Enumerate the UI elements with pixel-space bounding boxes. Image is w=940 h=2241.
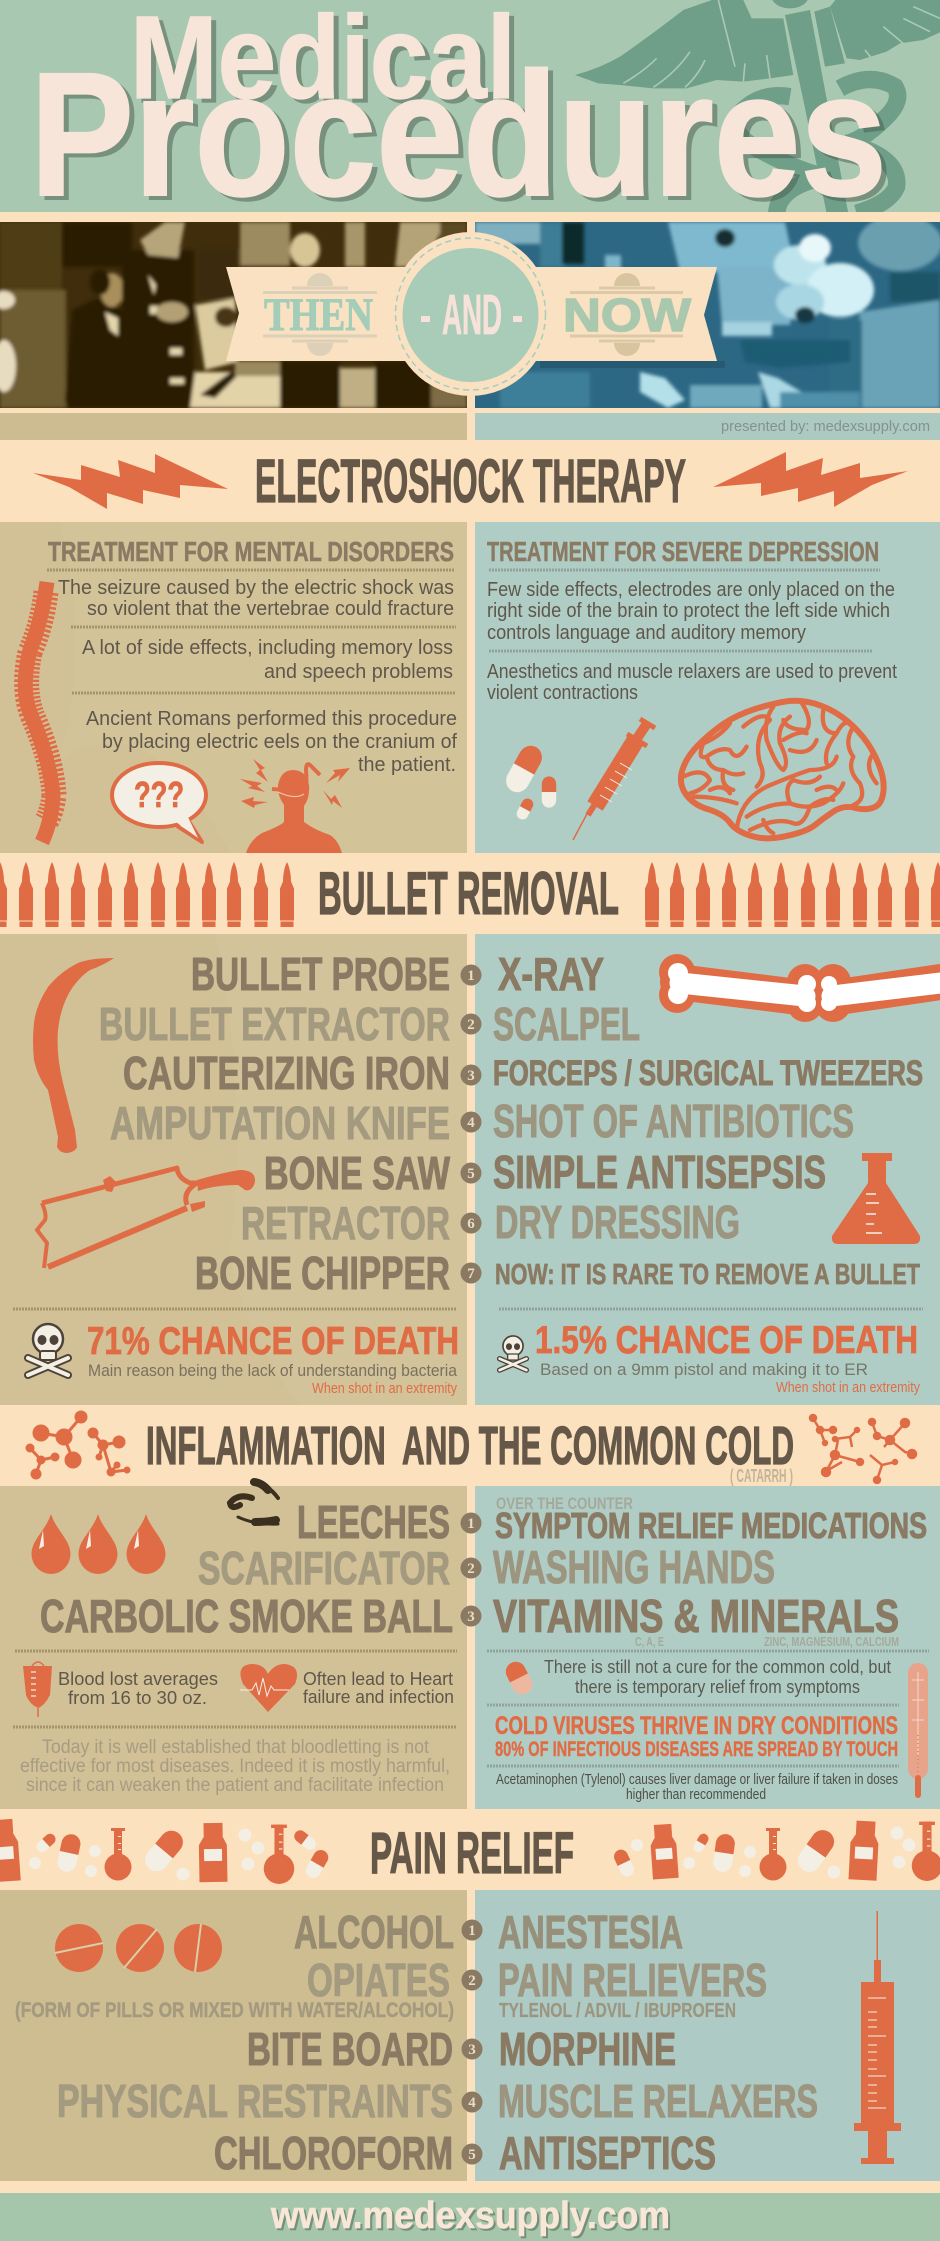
numbered markers: pain relief: [462, 1920, 482, 2164]
list: bullet tools: [99, 948, 450, 1299]
numbered markers: pain relief: 5: [468, 2147, 476, 2163]
then label: [263, 273, 377, 356]
stat: 1.5 percent: Based on a 9mm pistol and making it to ER: [540, 1360, 868, 1379]
panel: bullet removal then: [0, 934, 467, 1405]
numbered markers: pain relief: 2: [468, 1973, 476, 1989]
panel: inflammation now: [475, 1486, 940, 1809]
text block: so violent that the vertebrae could fracture: [87, 598, 454, 620]
list: modern pain relief: ANESTESIA: [498, 1906, 683, 1958]
icon: skull: [28, 1324, 68, 1375]
list: old pain relief: (FORM OF PILLS OR MIXED WITH WATER/ALCOHOL): [15, 1999, 454, 2022]
list: cold remedies: WASHING HANDS: [493, 1541, 775, 1593]
text block: bloodletting: since it can weaken the patient and facilitate infection: [26, 1775, 444, 1796]
panel: electroshock then: [0, 522, 467, 853]
icon: spine: [25, 582, 54, 842]
sublabel: catarrh: ( CATARRH ): [730, 1466, 793, 1486]
icon: molecule left: [27, 1412, 129, 1478]
icon: bullets left: [0, 862, 294, 927]
website url: www.medexsupply.com: [270, 2195, 670, 2237]
numbered markers: pain relief: 3: [468, 2042, 476, 2058]
icon: amputation knife: [33, 958, 114, 1153]
text block: [487, 579, 895, 644]
icon: leeches: [230, 1482, 278, 1524]
icon: thermometer: [908, 1663, 928, 1798]
text block: Few side effects, electrodes are only placed on the: [487, 579, 895, 601]
stat: 71 percent: 71% CHANCE OF DEATH: [87, 1320, 459, 1363]
heading: bullet removal: BULLET REMOVAL: [318, 860, 619, 927]
list: modern steps: [493, 948, 923, 1291]
text block: right side of the brain to protect the left side which: [487, 600, 890, 622]
list: old pain relief: CHLOROFORM: [214, 2127, 453, 2179]
list: cold remedies: C, A, E: [635, 1634, 664, 1649]
numbered markers: inflammation: [460, 1512, 482, 1626]
text block: violent contractions: [487, 682, 638, 704]
text: heart failure: failure and infection: [303, 1686, 454, 1707]
text block: Anesthetics and muscle relaxers are used to prevent: [487, 661, 897, 683]
list: bullet tools: CAUTERIZING IRON: [123, 1047, 450, 1099]
icon: brain: [681, 700, 884, 838]
text block: [58, 577, 454, 620]
text: heart failure: Often lead to Heart: [303, 1668, 453, 1689]
text: acetaminophen: [496, 1772, 898, 1803]
text block: bloodletting: Today it is well established that bloodletting is not: [42, 1737, 430, 1758]
list: modern pain relief: TYLENOL / ADVIL / IBUPROFEN: [499, 2000, 736, 2022]
list: old pain relief: [15, 1906, 454, 2179]
list: bullet tools: AMPUTATION KNIFE: [110, 1097, 450, 1149]
text: blood lost: Blood lost averages: [58, 1668, 218, 1689]
icon: capsule: [502, 1658, 536, 1698]
panel: pain relief now: [475, 1890, 940, 2181]
icon: bolt left: [33, 454, 228, 509]
list: cold treatments: CARBOLIC SMOKE BALL: [40, 1590, 453, 1642]
panel: bullet removal now: [475, 934, 940, 1405]
banner: then and now: [226, 232, 725, 396]
heading: bullet removal: [0, 860, 940, 927]
now label: NOW: [563, 289, 692, 341]
list: old pain relief: BITE BOARD: [247, 2023, 453, 2075]
icon: syringe: [573, 719, 655, 840]
ribbon: [226, 267, 717, 361]
badge: and: AND: [442, 283, 502, 347]
list: cold remedies: OVER THE COUNTER: [496, 1494, 633, 1513]
list: modern pain relief: MORPHINE: [499, 2023, 676, 2075]
text block: by placing electric eels on the cranium of: [102, 731, 457, 753]
numbered markers: bullet removal: 5: [467, 1166, 475, 1182]
icon: speech bubble: [112, 763, 206, 842]
list: bullet tools: BULLET EXTRACTOR: [99, 998, 450, 1050]
icon: skull: [500, 1336, 526, 1370]
list: bullet tools: BONE SAW: [264, 1147, 450, 1199]
header panel: [0, 0, 940, 233]
panel: pain relief then: [0, 1890, 467, 2181]
list: cold treatments: [40, 1496, 453, 1642]
now label: [563, 273, 692, 356]
stat: 71 percent: When shot in an extremity: [312, 1380, 457, 1397]
icon: syringe: [854, 1911, 901, 2164]
text: blood lost: [58, 1668, 218, 1708]
heading: pain relief: [0, 1819, 940, 1886]
text: no cure: There is still not a cure for the common cold, but: [544, 1657, 891, 1677]
icon: bone saw: [37, 1168, 255, 1268]
numbered markers: bullet removal: 3: [467, 1068, 475, 1084]
icon: heart: [240, 1664, 297, 1712]
badge: and: [390, 232, 550, 396]
credit: presented by: medexsupply.com: [721, 419, 930, 435]
title: [30, 0, 887, 233]
list: modern steps: X-RAY: [498, 948, 604, 1000]
list: old pain relief: ALCOHOL: [294, 1906, 454, 1958]
panel: electroshock now: [475, 522, 940, 853]
icon row: medicine right: [612, 1820, 940, 1881]
list: old pain relief: PHYSICAL RESTRAINTS: [57, 2075, 453, 2127]
numbered markers: pain relief: 4: [468, 2095, 476, 2111]
numbered markers: bullet removal: [460, 964, 482, 1284]
heading: inflammation and the common cold: [27, 1412, 916, 1486]
icon: blood drops: [32, 1514, 166, 1574]
text: no cure: [544, 1657, 891, 1697]
icon: head with eel: [240, 759, 350, 853]
list: bullet tools: RETRACTOR: [241, 1197, 450, 1249]
numbered markers: bullet removal: 7: [467, 1266, 475, 1282]
numbered markers: pain relief: 1: [468, 1923, 476, 1939]
text block: [487, 661, 897, 704]
text: heart failure: [303, 1668, 454, 1707]
list: old pain relief: OPIATES: [307, 1954, 450, 2006]
list: bullet tools: BONE CHIPPER: [195, 1247, 450, 1299]
icon row: medicine left: [0, 1819, 331, 1884]
icon: tablets: [55, 1924, 222, 1972]
text block: A lot of side effects, including memory loss: [82, 637, 453, 659]
callout: cold viruses: [495, 1712, 898, 1761]
icon: iv bag: [23, 1662, 52, 1717]
list: modern steps: DRY DRESSING: [495, 1196, 740, 1248]
stat: 71 percent: Main reason being the lack of understanding bacteria: [88, 1361, 457, 1380]
icon: caduceus: [575, 0, 940, 215]
text block: [82, 637, 453, 683]
numbered markers: bullet removal: 1: [467, 968, 475, 984]
text block: the patient.: [358, 754, 456, 776]
list: modern steps: SIMPLE ANTISEPSIS: [493, 1146, 826, 1198]
numbered markers: inflammation: 1: [467, 1516, 475, 1532]
icon: bullets right: [645, 862, 940, 927]
text block: bloodletting: effective for most diseases. Indeed it is mostly harmful,: [20, 1756, 450, 1777]
subheading: TREATMENT FOR MENTAL DISORDERS: [48, 536, 454, 567]
footer: [0, 2193, 940, 2241]
numbered markers: bullet removal: 6: [467, 1216, 475, 1232]
heading: pain relief: PAIN RELIEF: [370, 1821, 574, 1886]
list: modern pain relief: ANTISEPTICS: [499, 2127, 716, 2179]
list: modern pain relief: PAIN RELIEVERS: [498, 1954, 767, 2006]
list: cold treatments: LEECHES: [297, 1496, 450, 1548]
text: acetaminophen: higher than recommended: [626, 1787, 766, 1803]
list: bullet tools: BULLET PROBE: [191, 948, 450, 1000]
icon: bones: [659, 954, 940, 1022]
text: blood lost: from 16 to 30 oz.: [68, 1687, 207, 1708]
panel: inflammation then: [0, 1482, 467, 1809]
list: cold remedies: [493, 1494, 927, 1649]
icon: flask: [832, 1153, 920, 1244]
list: modern pain relief: [498, 1906, 818, 2179]
text: no cure: there is temporary relief from symptoms: [575, 1677, 860, 1697]
text block: and speech problems: [264, 661, 453, 683]
icon: speech bubble: ???: [134, 774, 184, 815]
text block: Ancient Romans performed this procedure: [86, 708, 457, 730]
photo: then: [0, 222, 467, 408]
list: cold treatments: SCARIFICATOR: [198, 1542, 450, 1594]
icon: bolt right: [713, 452, 908, 507]
icon: molecule right: [810, 1415, 916, 1483]
text block: bloodletting: [20, 1737, 450, 1796]
text block: controls language and auditory memory: [487, 622, 806, 644]
strip under photos: [0, 413, 940, 440]
then label: THEN: [264, 289, 373, 341]
numbered markers: bullet removal: 4: [467, 1115, 475, 1131]
text block: [86, 708, 457, 776]
numbered markers: inflammation: 2: [467, 1561, 475, 1577]
icon: pills: [502, 742, 556, 821]
list: modern steps: SCALPEL: [493, 998, 640, 1050]
stat: 1.5 percent: [500, 1319, 920, 1396]
text block: The seizure caused by the electric shock was: [58, 577, 454, 599]
numbered markers: bullet removal: 2: [467, 1017, 475, 1033]
photo: now: [475, 215, 940, 408]
stat: 71 percent: [28, 1320, 459, 1397]
numbered markers: inflammation: 3: [467, 1609, 475, 1625]
